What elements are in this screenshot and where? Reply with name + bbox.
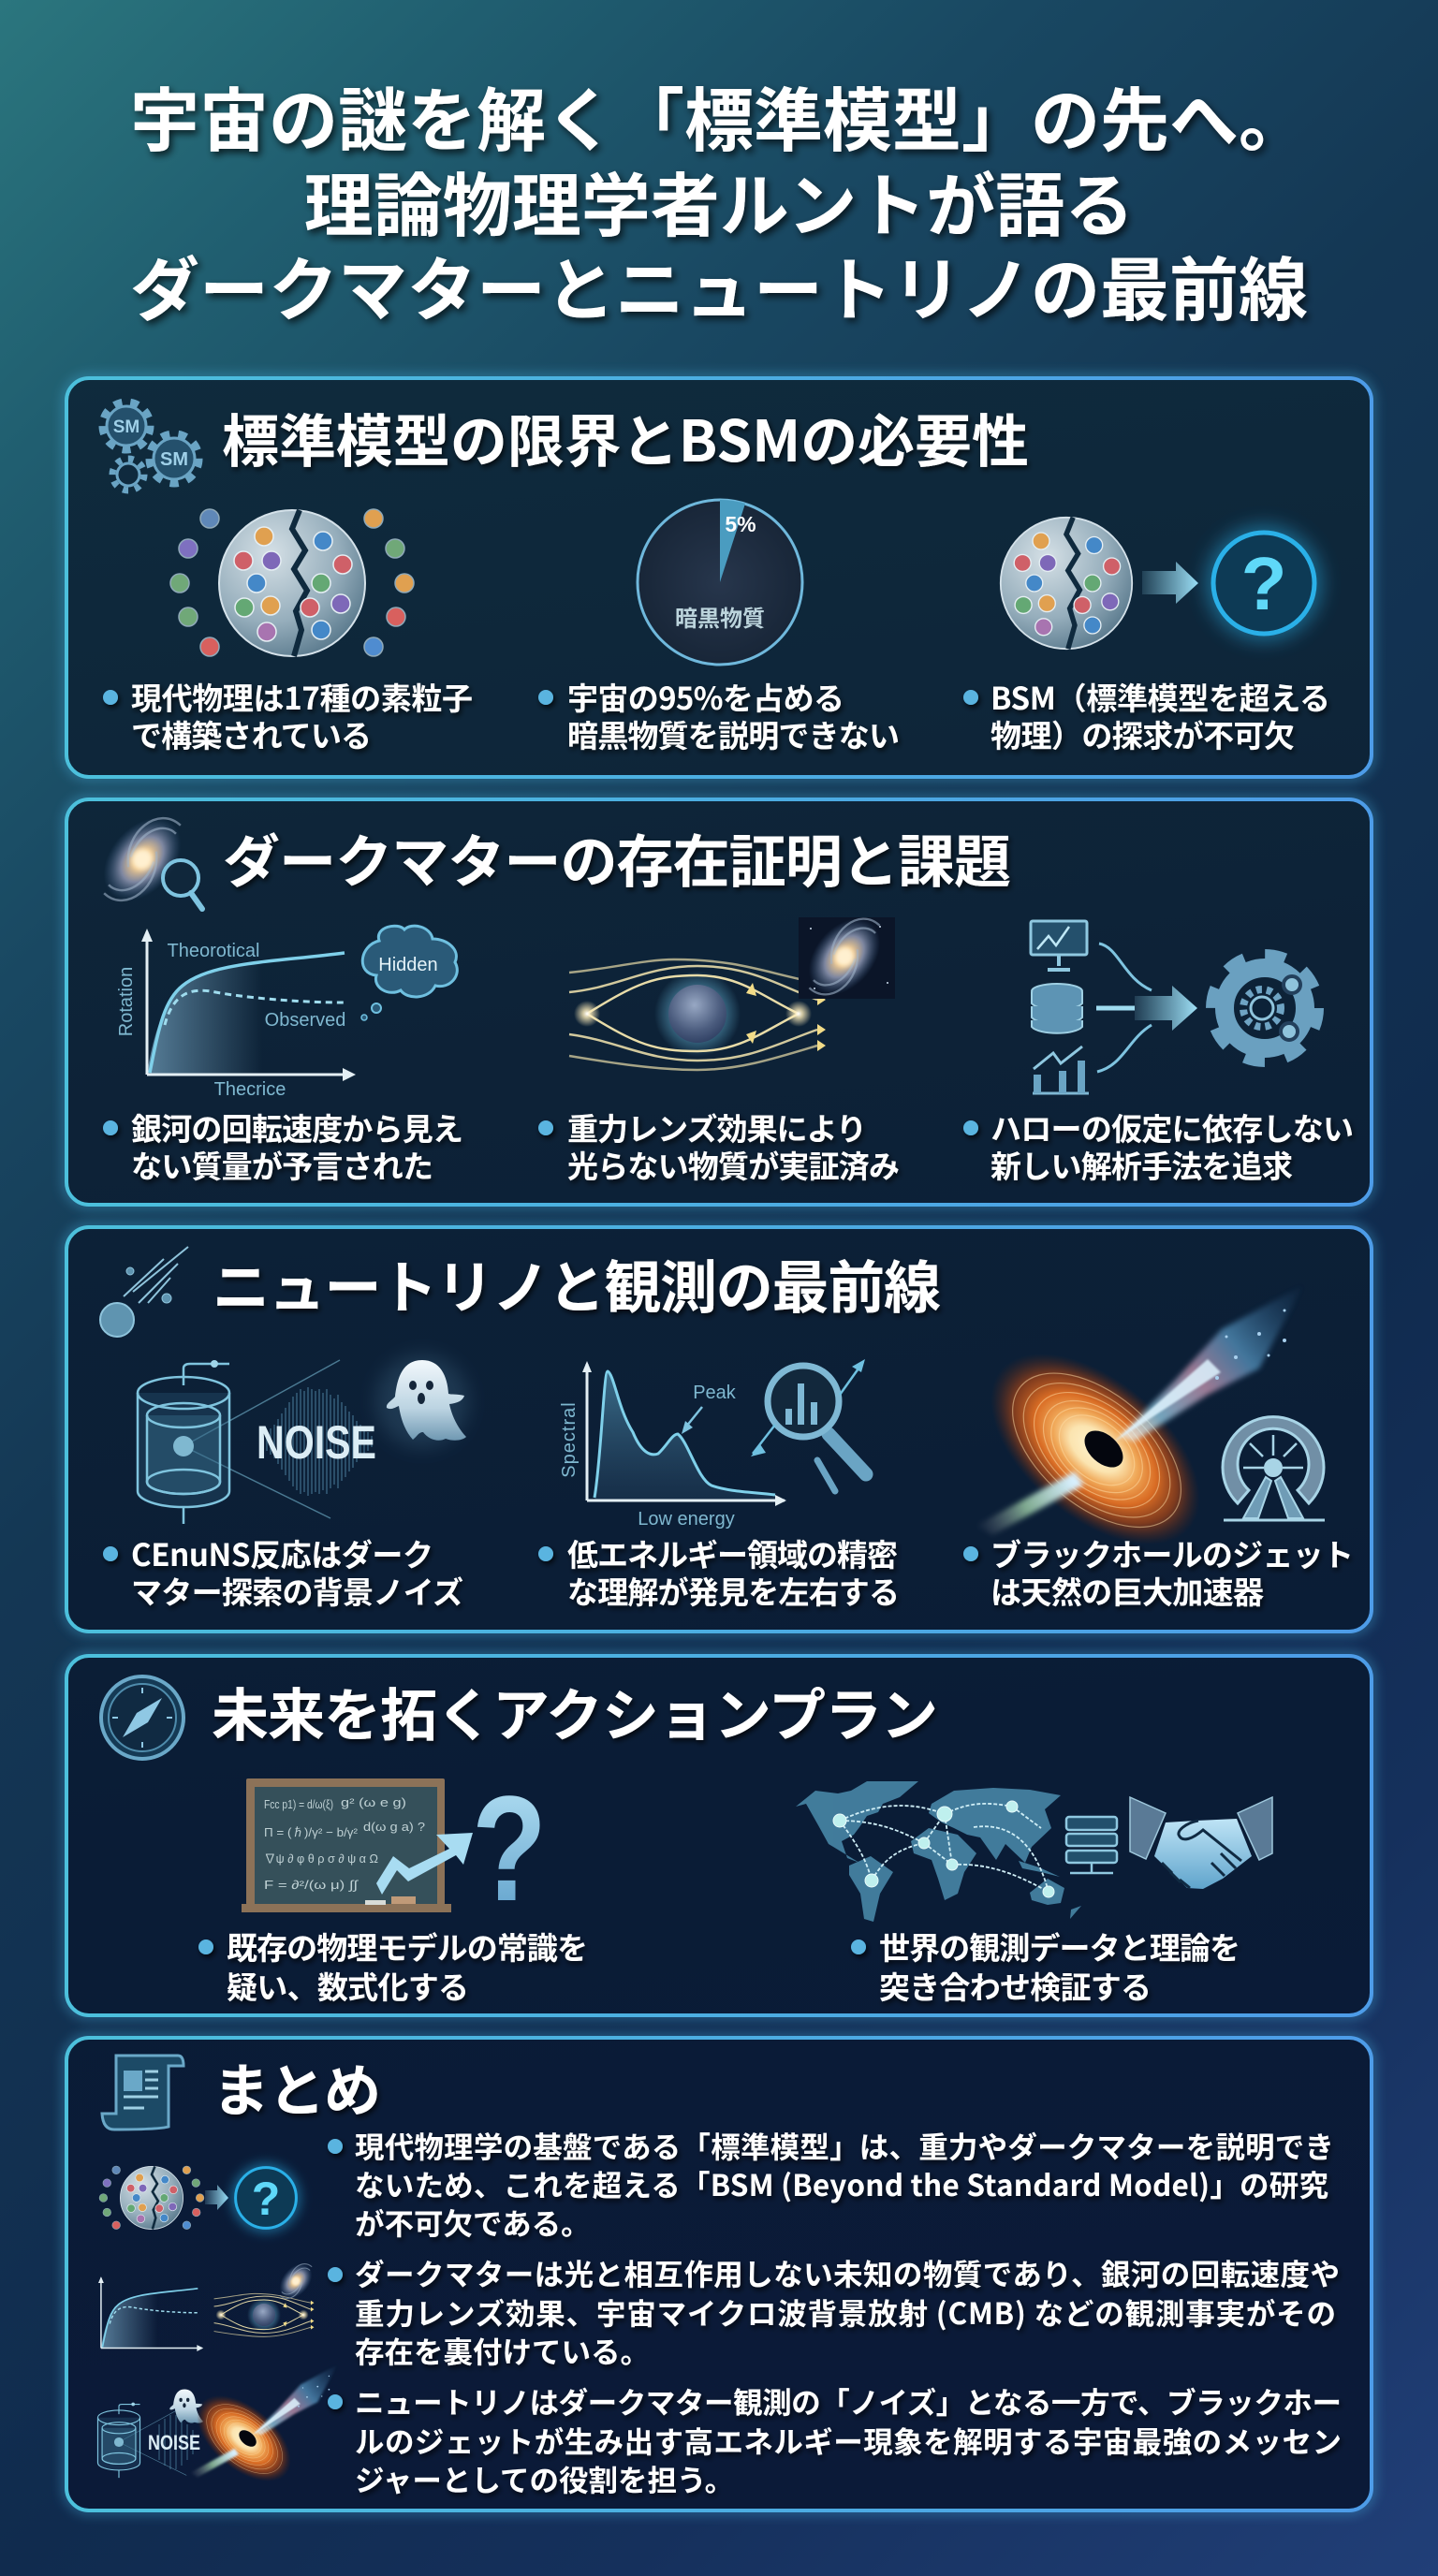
icon: handshake [1130, 1797, 1272, 1889]
bullet: rotation [103, 1105, 463, 1187]
bullet: low energy: な理解が発見を左右する [567, 1568, 900, 1613]
bullet: 95%: 暗黒物質を説明できない [567, 711, 900, 756]
icon: magnifier with bars [751, 1359, 866, 1491]
noise waveform [267, 1387, 372, 1496]
bullet: CEnuNS: CEnuNS反応はダーク [131, 1530, 433, 1575]
chart: 5% pie [638, 500, 802, 665]
icon: scroll [102, 2056, 183, 2130]
bullet: halo [963, 1105, 1354, 1187]
illustration: blackboard: ∇ψ ∂ φ θ ρ σ ∂ ψ α Ω [264, 1852, 378, 1866]
panel: 未来を拓くアクションプラン [66, 1656, 1372, 2015]
icon: gear [1214, 958, 1315, 1059]
thumbnail: dark matter [98, 2256, 320, 2351]
chart: low energy spectrum: Spectral [559, 1401, 580, 1478]
bullet: question models: 疑い、数式化する [227, 1963, 469, 2008]
icon: Hidden cloud: Hidden [378, 955, 438, 975]
bullet: CEnuNS: マター探索の背景ノイズ [131, 1568, 463, 1613]
bullet: question models [198, 1924, 588, 2008]
summary item 1: 現代物理学の基盤である「標準模型」は、重力やダークマターを説明でき [355, 2124, 1334, 2167]
illustration: blackboard: F = ∂²/(ω μ) ∫∫ [264, 1878, 360, 1892]
summary item 2: ダークマターは光と相互作用しない未知の物質であり、銀河の回転速度や [355, 2251, 1340, 2294]
illustration: blackboard [242, 1778, 473, 1912]
icon: database [1032, 984, 1082, 1033]
panel: まとめ [66, 2038, 1372, 2510]
icon: SM gears: SM [160, 449, 188, 470]
illustration: blackboard: Π = (ℏ)/γ² − b/γ² [264, 1825, 359, 1839]
chart: low energy spectrum [559, 1361, 786, 1530]
heading: ダークマターの存在証明と課題 [223, 815, 1011, 899]
chart: rotation curve: Thecrice [214, 1079, 286, 1100]
summary item 2: 重力レンズ効果、宇宙マイクロ波背景放射 (CMB) などの観測事実がその [355, 2291, 1336, 2334]
icon: accelerator wheel [1223, 1417, 1325, 1520]
bullet: halo: ハローの仮定に依存しない [990, 1105, 1354, 1149]
bullet: BSM: BSM（標準模型を超える [990, 674, 1330, 719]
panel: ダークマターの存在証明と課題 [66, 799, 1372, 1205]
bullet: CEnuNS [103, 1530, 463, 1613]
bullet: 95% [538, 674, 900, 756]
bullet: jet: ブラックホールのジェット [990, 1530, 1354, 1575]
bullet: 95%: 宇宙の95%を占める [567, 674, 844, 719]
illustration: gravitational lensing [569, 902, 897, 1070]
illustration: blackboard: Fcc p1) = d/ω(ξ) [264, 1797, 333, 1811]
illustration: sphere to question mark: ? [1241, 542, 1286, 625]
thumbnail: neutrino: NOISE [148, 2431, 200, 2454]
summary item 1: ないため、これを超える「BSM (Beyond the Standard Model)」の研究 [355, 2162, 1328, 2205]
icon: Hidden cloud [361, 926, 457, 1020]
bullet: lensing: 重力レンズ効果により [567, 1105, 867, 1149]
bullet: lensing: 光らない物質が実証済み [567, 1142, 900, 1187]
chart: low energy spectrum: Peak [693, 1383, 737, 1403]
bullet: BSM: 物理）の探求が不可欠 [990, 711, 1295, 756]
title: 理論物理学者ルントが語る [304, 151, 1134, 251]
icon: compass [101, 1676, 183, 1759]
title: 宇宙の謎を解く「標準模型」の先へ。 [130, 66, 1308, 166]
bullet: verify data: 突き合わせ検証する [879, 1963, 1152, 2008]
bullet: 17 particles [103, 674, 473, 756]
icon: monitor [1031, 921, 1087, 970]
bullet: 17 particles: で構築されている [131, 711, 372, 756]
bullet: 17 particles: 現代物理は17種の素粒子 [131, 674, 473, 719]
icon: bar chart [1033, 1046, 1089, 1093]
bullet: BSM [963, 674, 1330, 756]
bullet: question models: 既存の物理モデルの常識を [227, 1924, 588, 1969]
title: ダークマターとニュートリノの最前線 [130, 235, 1308, 335]
bullet: rotation: 銀河の回転速度から見え [131, 1105, 463, 1149]
panel: ニュートリノと観測の最前線 [66, 1227, 1372, 1632]
summary item 2: 存在を裏付けている。 [355, 2329, 650, 2372]
icon: question mark: ? [472, 1766, 547, 1933]
summary item 3 [328, 2379, 1342, 2500]
chart: 5% pie: 5% [725, 512, 756, 536]
bullet: verify data [851, 1924, 1240, 2008]
heading: 未来を拓くアクションプラン [212, 1669, 938, 1752]
chart: rotation curve: Observed [265, 1010, 345, 1031]
chart: rotation curve: Theorotical [168, 941, 259, 961]
summary item 1 [328, 2124, 1334, 2244]
panel: 標準模型の限界とBSMの必要性 [66, 378, 1372, 777]
illustration: sphere to question mark [1001, 518, 1322, 649]
icon: SM gears [103, 402, 198, 490]
summary item 1: が不可欠である。 [355, 2201, 591, 2244]
chart: 5% pie: 暗黒物質 [675, 600, 765, 633]
chart: rotation curve [116, 926, 457, 1100]
icon: server rack [1066, 1817, 1117, 1873]
summary item 3: ルのジェットが生み出す高エネルギー現象を解明する宇宙最強のメッセン [355, 2419, 1342, 2462]
chart: low energy spectrum: Low energy [638, 1509, 735, 1530]
illustration: detector with noise and ghost [138, 1354, 469, 1524]
summary item 2 [328, 2251, 1340, 2372]
thumbnail: neutrino [97, 2364, 337, 2498]
summary item 3: ジャーとしての役割を担う。 [355, 2457, 734, 2500]
chart: rotation curve: Rotation [116, 967, 137, 1036]
icon: neutrino streak [100, 1247, 188, 1337]
bullet: low energy [538, 1530, 900, 1613]
bullet: rotation: ない質量が予言された [131, 1142, 433, 1187]
bullet: jet [963, 1530, 1354, 1613]
bullet: jet: は天然の巨大加速器 [990, 1568, 1264, 1613]
bullet: verify data: 世界の観測データと理論を [879, 1924, 1240, 1969]
illustration: new analysis inputs into gear [1031, 921, 1315, 1093]
icon: SM gears: SM [113, 417, 139, 437]
illustration: world data map [796, 1781, 1081, 1922]
heading: ニュートリノと観測の最前線 [213, 1241, 941, 1325]
illustration: broken particle sphere [170, 509, 414, 656]
thumbnail: BSM [99, 2163, 301, 2232]
illustration: blackboard: d(ω g a) ? [363, 1820, 425, 1834]
bullet: lensing [538, 1105, 900, 1187]
illustration: detector with noise and ghost: NOISE [257, 1416, 376, 1469]
illustration: black hole jet [956, 1285, 1303, 1582]
title [130, 66, 1308, 335]
heading: まとめ [213, 2044, 381, 2128]
bullet: halo: 新しい解析手法を追求 [990, 1142, 1293, 1187]
thumbnail: BSM: ? [252, 2173, 280, 2225]
illustration: blackboard: g² (ω e g) [341, 1795, 406, 1809]
heading: 標準模型の限界とBSMの必要性 [222, 395, 1029, 478]
summary item 3: ニュートリノはダークマター観測の「ノイズ」となる一方で、ブラックホー [355, 2379, 1342, 2422]
icon: galaxy and magnifier [85, 800, 202, 918]
bullet: low energy: 低エネルギー領域の精密 [567, 1530, 898, 1575]
